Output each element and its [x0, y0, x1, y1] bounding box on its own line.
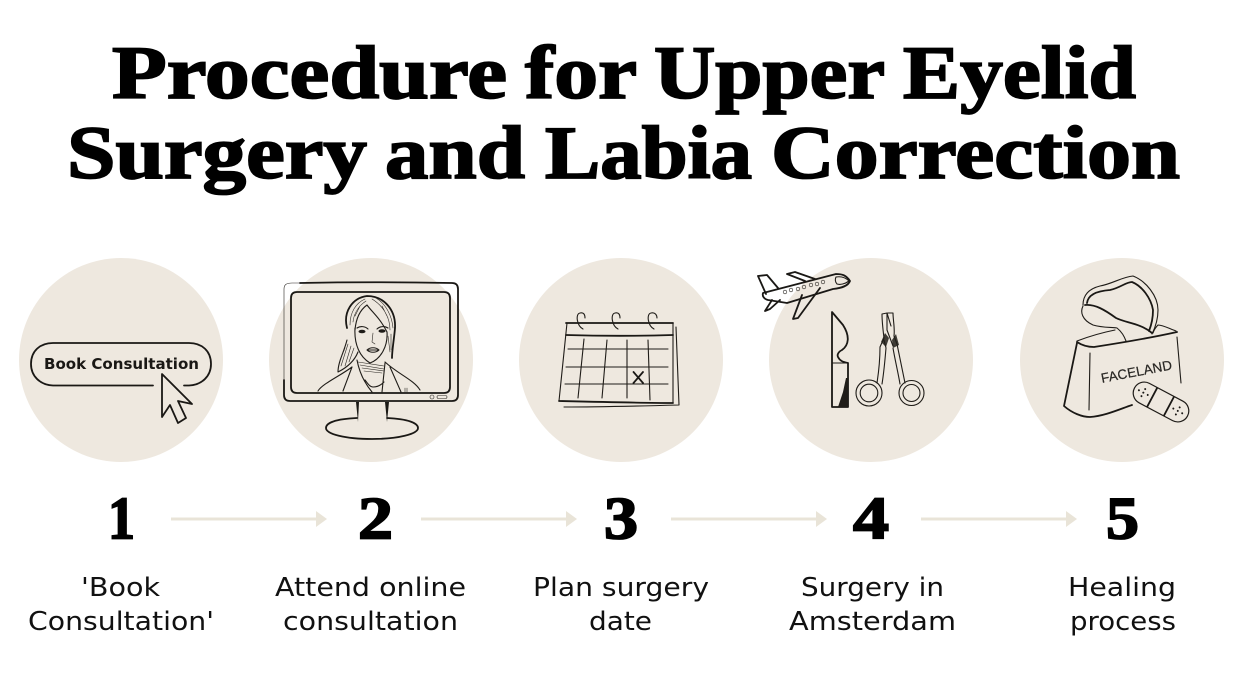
arrow 2 to 3 — [421, 511, 577, 527]
label step 4: Amsterdam — [789, 607, 956, 637]
label step 1 — [28, 573, 214, 637]
scissors — [856, 313, 924, 406]
step numbers: 2 — [358, 486, 393, 552]
arrow 4 to 5 — [921, 511, 1077, 527]
step 3 icon: calendar with marked date — [519, 258, 723, 462]
label step 1: Consultation' — [28, 607, 214, 637]
step numbers: 3 — [604, 486, 638, 552]
step 1 icon: book consultation button: Book Consultation — [44, 355, 199, 373]
label step 2 — [275, 573, 466, 637]
step 5 icon: faceland bag with plaster: FACELAND — [1100, 357, 1173, 386]
arrow 1 to 2 — [171, 511, 327, 527]
label step 3: Plan surgery — [533, 573, 709, 603]
label step 5: process — [1070, 607, 1176, 637]
label step 3: date — [589, 607, 652, 637]
label step 5: Healing — [1068, 573, 1176, 603]
title: Eyelid — [903, 32, 1136, 115]
step 5 icon: faceland bag with plaster — [1020, 258, 1224, 462]
step 4 icon: airplane, scalpel and scissors — [758, 258, 973, 462]
arrow 3 to 4 — [671, 511, 827, 527]
plaster — [1129, 378, 1193, 426]
step numbers: 5 — [1106, 486, 1139, 552]
step 1 icon: book consultation button — [19, 258, 223, 462]
scalpel — [832, 312, 848, 407]
label step 4 — [789, 573, 956, 637]
title — [67, 32, 1180, 195]
step numbers: 4 — [853, 486, 889, 552]
title: for — [525, 32, 637, 115]
step numbers: 1 — [108, 486, 135, 552]
label step 3 — [533, 573, 709, 637]
step numbers — [108, 486, 1139, 552]
title: Procedure — [112, 32, 507, 115]
label step 4: Surgery in — [801, 573, 944, 603]
title: Surgery — [67, 112, 367, 195]
title: Labia — [545, 112, 752, 195]
title: Upper — [654, 32, 885, 115]
label step 1: 'Book — [81, 573, 160, 603]
title: and — [385, 112, 525, 195]
label step 5 — [1068, 573, 1176, 637]
label step 2: Attend online — [275, 573, 466, 603]
step 2 icon: monitor with doctor on video call — [269, 258, 473, 462]
airplane — [758, 272, 850, 319]
doctor portrait — [318, 296, 420, 392]
title: Correction — [771, 112, 1180, 195]
label step 2: consultation — [283, 607, 458, 637]
